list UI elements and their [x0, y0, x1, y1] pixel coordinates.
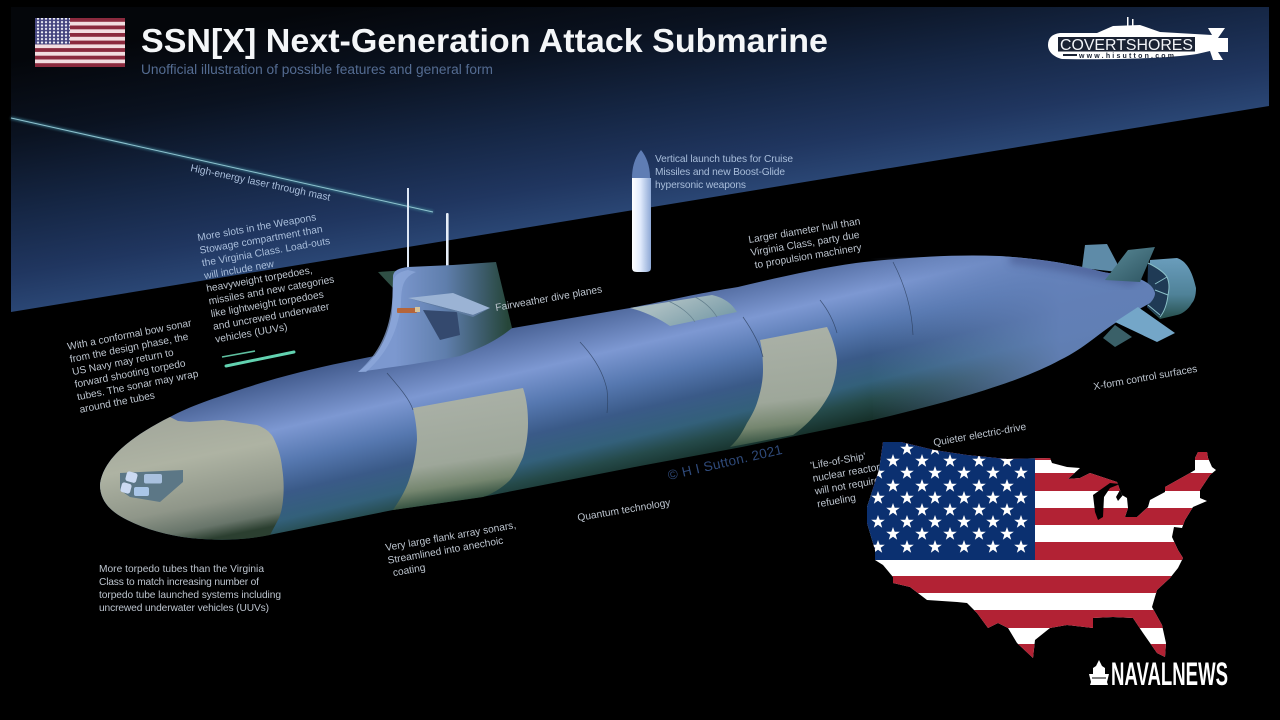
label: weapons stowage: will include new — [202, 259, 276, 282]
icon: US flag — [35, 18, 125, 67]
flank array panel 2 — [730, 327, 837, 447]
label: bow sonar: from the design phase, the — [69, 332, 190, 366]
mast 1 — [407, 188, 409, 274]
stern front fins — [1105, 247, 1175, 342]
label: copyright: © H I Sutton. 2021 — [666, 442, 784, 483]
label: vertical launch tubes: Missiles and new Boost-Glide — [655, 167, 785, 178]
logo: Covert Shores: COVERTSHORES — [1060, 37, 1193, 54]
label: x-form control surfaces: X-form control surfaces — [1093, 364, 1198, 393]
label: larger diameter hull: Virginia Class, party due — [750, 230, 861, 259]
label: weapons stowage: and uncrewed underwater — [212, 301, 331, 333]
map: USA with flag fill — [860, 440, 1220, 662]
sonar nose cone — [100, 417, 284, 540]
label: quieter electric-drive: Quieter electric-drive — [933, 422, 1027, 449]
label: quantum technology: Quantum technology — [577, 497, 672, 524]
label: weapons stowage: vehicles (UUVs) — [215, 322, 288, 346]
stern shroud and rear fins — [1082, 244, 1196, 347]
logo: Covert Shores — [1048, 17, 1228, 60]
label: more torpedo tubes: Class to match increasing number of — [99, 577, 259, 588]
label: larger diameter hull — [748, 216, 865, 272]
vertical launch hatches — [630, 295, 737, 326]
label: life-of-ship reactor: nuclear reactor — [812, 462, 881, 485]
label: weapons stowage: Stowage compartment than — [199, 224, 323, 257]
label: weapons stowage: heavyweight torpedoes, — [206, 265, 313, 295]
label: bow sonar: around the tubes — [79, 390, 156, 416]
label: larger diameter hull: Larger diameter hull than — [748, 216, 861, 246]
label: flank array sonars: coating — [392, 562, 427, 579]
torpedo tube cluster — [120, 470, 183, 502]
label: weapons stowage: like lightweight torpedoes — [210, 289, 325, 320]
label: flank array sonars — [385, 520, 522, 580]
hull section seams — [387, 262, 913, 413]
background panel: blue water gradient — [11, 7, 1269, 312]
label: vertical launch tubes: hypersonic weapons — [655, 180, 746, 191]
logo: Covert Shores: www.hisutton.com — [1078, 53, 1174, 60]
subtitle: Unofficial illustration of possible features and general form — [141, 62, 493, 77]
submarine hull — [100, 250, 1155, 540]
label: weapons stowage: the Virginia Class. Load-outs — [201, 236, 331, 269]
label: bow sonar: US Navy may return to — [71, 348, 175, 378]
label: more torpedo tubes: More torpedo tubes than the Virginia — [99, 564, 264, 575]
label: larger diameter hull: to propulsion machinery — [754, 242, 863, 271]
laser beam — [11, 118, 433, 212]
mast 2 — [446, 213, 449, 267]
label: bow sonar — [66, 318, 205, 416]
label: life-of-ship reactor: will not require — [813, 475, 881, 498]
label: laser: High-energy laser through mast — [189, 163, 331, 204]
label: more torpedo tubes: uncrewed underwater vehicles (UUVs) — [99, 603, 269, 614]
label: flank array sonars: Streamlined into anechoic — [387, 536, 504, 567]
icon: small torpedoes — [222, 351, 294, 366]
label: vertical launch tubes — [655, 154, 793, 191]
label: life-of-ship reactor — [809, 449, 886, 511]
label: more torpedo tubes: torpedo tube launched systems including — [99, 590, 281, 601]
label: weapons stowage: More slots in the Weapons — [197, 212, 317, 244]
flank array panel 1 — [393, 388, 528, 510]
label: vertical launch tubes: Vertical launch tubes for Cruise — [655, 154, 793, 165]
label: weapons stowage: missiles and new categories — [208, 275, 335, 307]
label: bow sonar: forward shooting torpedo — [74, 358, 187, 391]
submarine sail — [358, 262, 512, 372]
missile — [632, 150, 651, 272]
logo: Naval News — [1089, 656, 1228, 692]
label: life-of-ship reactor: refueling — [816, 493, 857, 510]
label: flank array sonars: Very large flank array sonars, — [385, 520, 517, 554]
label: more torpedo tubes — [99, 564, 281, 614]
label: bow sonar: With a conformal bow sonar — [66, 318, 193, 353]
title: SSN[X] Next-Generation Attack Submarine — [141, 22, 828, 59]
label: weapons stowage — [196, 211, 345, 346]
label: bow sonar: tubes. The sonar may wrap — [76, 369, 200, 403]
label: life-of-ship reactor: 'Life-of-Ship' — [810, 451, 867, 472]
label: fairweather dive planes: Fairweather dive planes — [495, 284, 603, 314]
